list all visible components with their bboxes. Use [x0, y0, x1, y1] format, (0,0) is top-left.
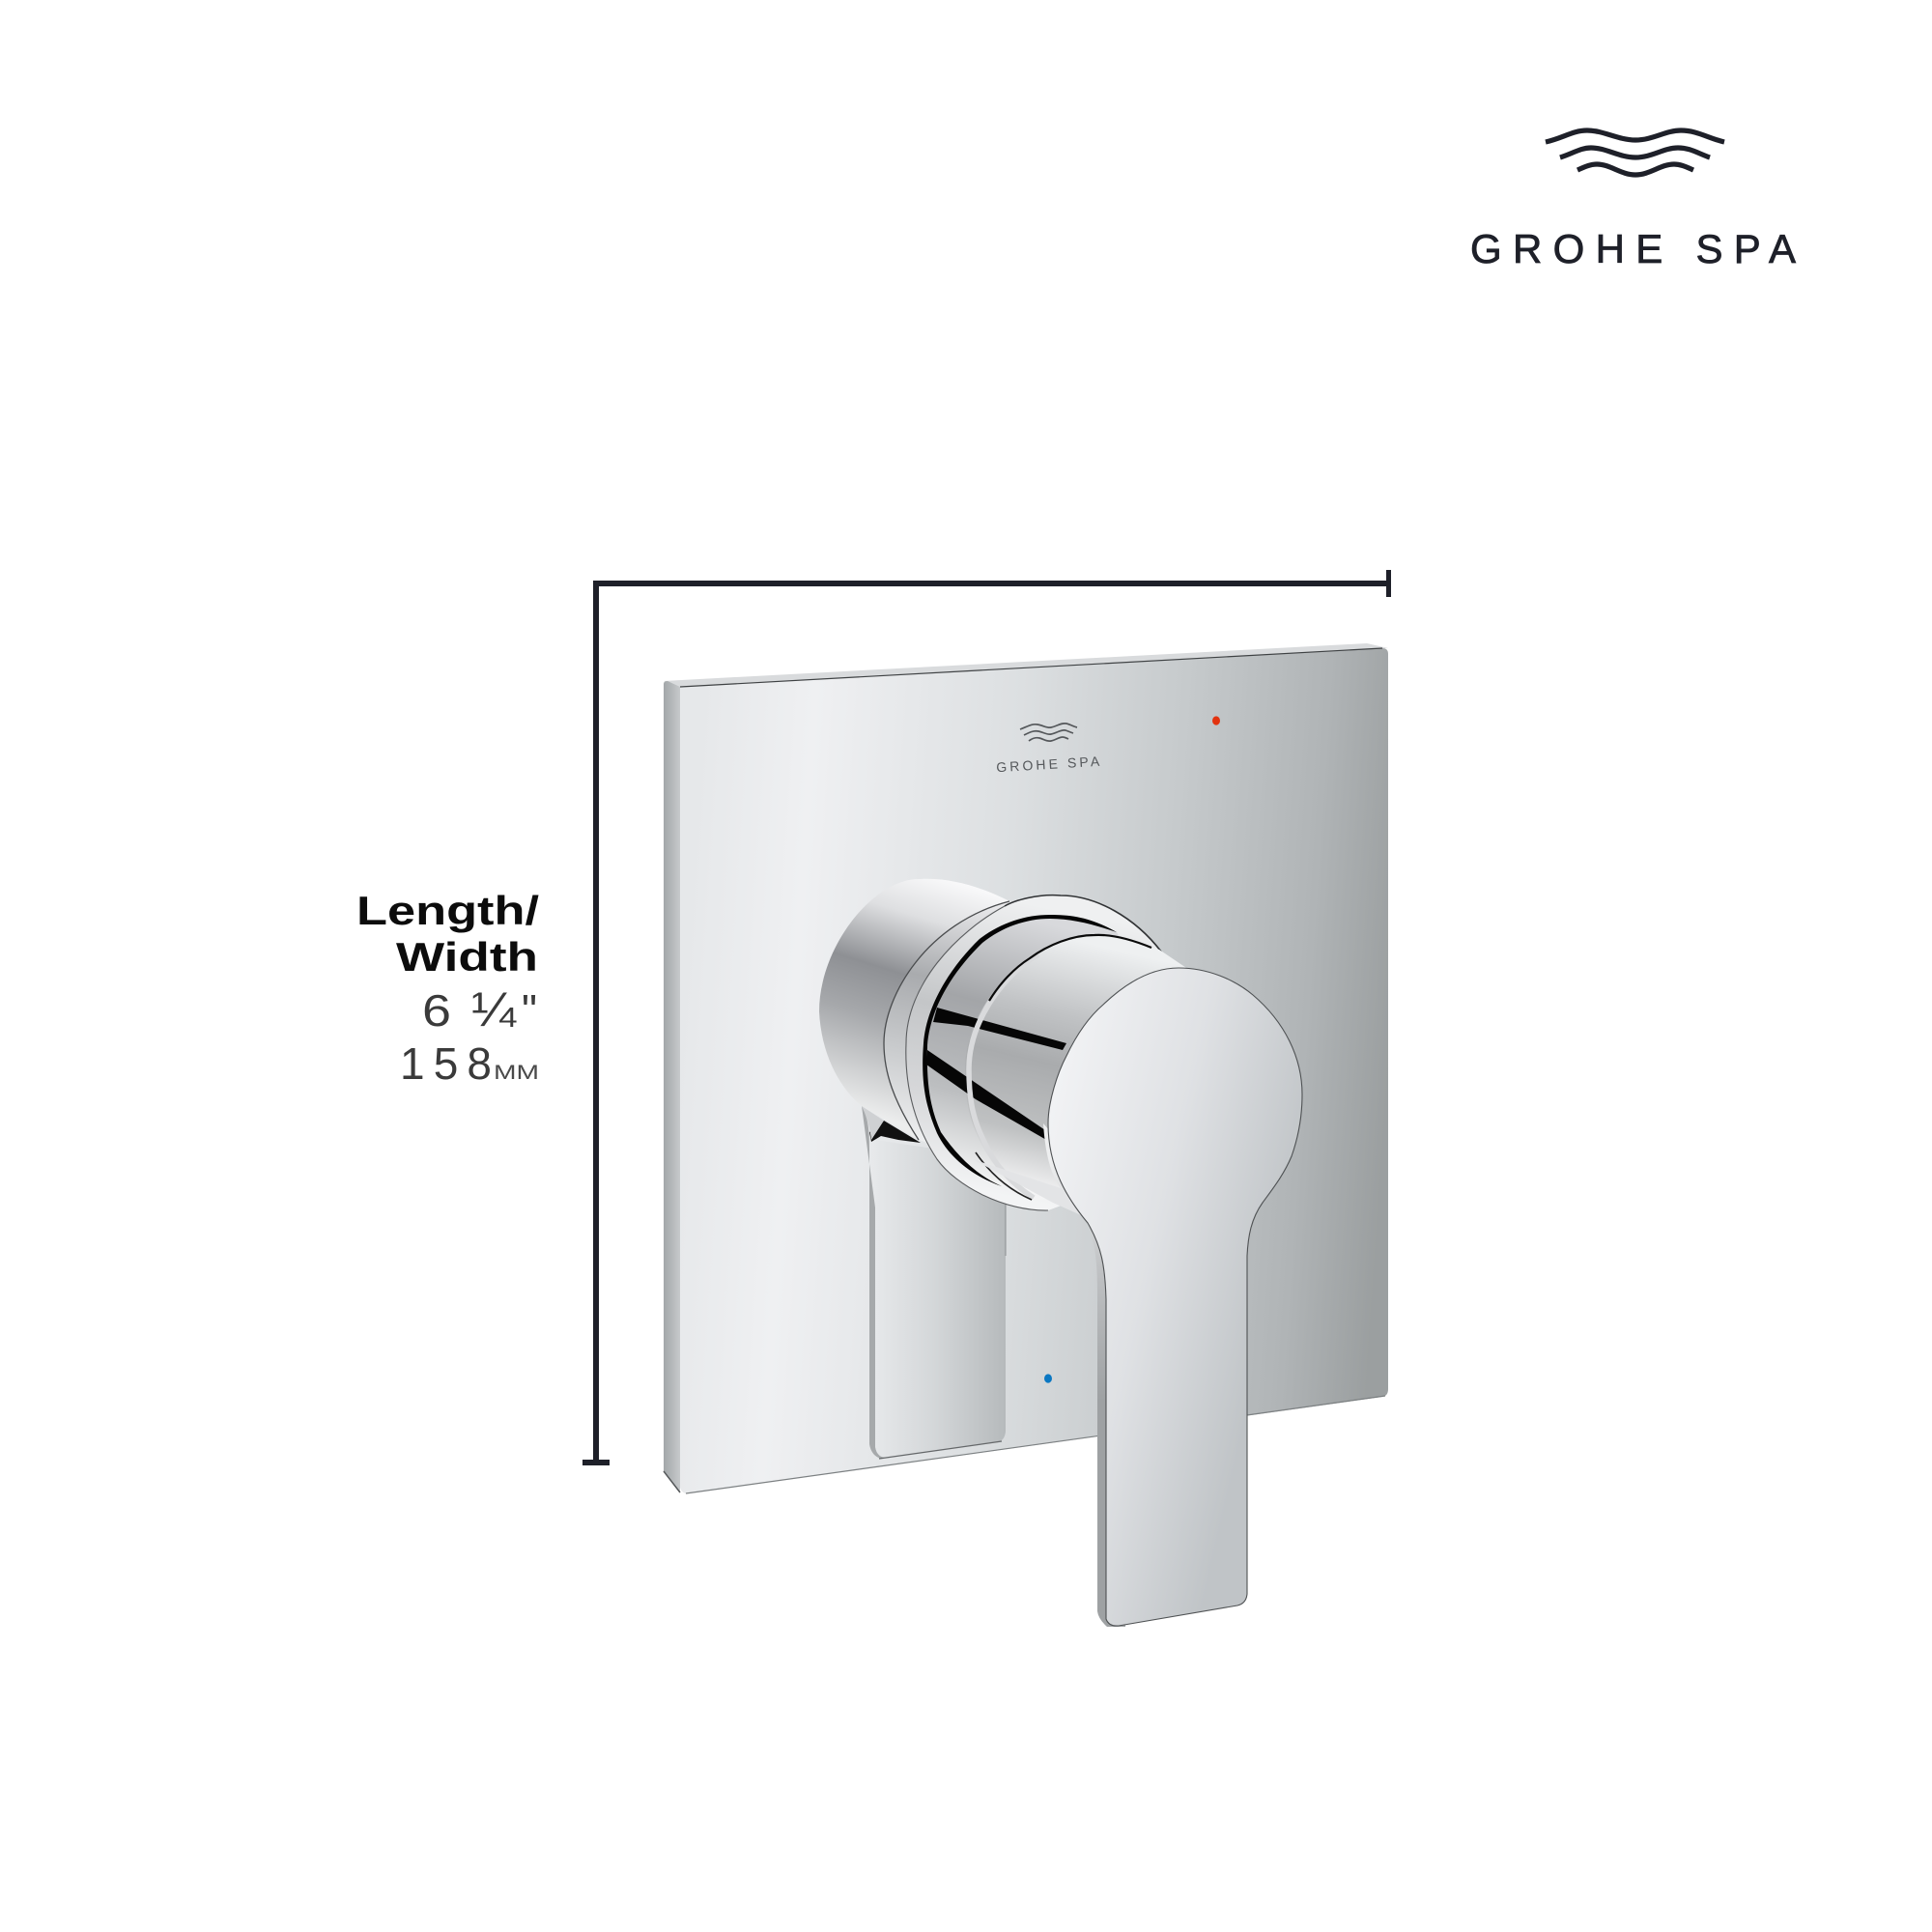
cold indicator: [1044, 1374, 1052, 1383]
wall plate: [664, 643, 1388, 1493]
plate logo: GROHE SPA: [996, 753, 1100, 775]
dimension label: ¼: [471, 982, 517, 1037]
ring band: [884, 901, 1063, 1159]
logo: Grohe Spa: [1470, 130, 1796, 271]
dimension label: Width: [396, 934, 538, 980]
silver front ring: [969, 935, 1151, 1200]
lower lever: [862, 1106, 1006, 1459]
hot indicator: [1212, 716, 1220, 725]
product: shower valve trim: [664, 643, 1388, 1627]
dimension label: 158: [400, 1038, 492, 1089]
dimension label: 6: [422, 985, 451, 1036]
rear cylinder: [819, 879, 1009, 1140]
main handle: [973, 968, 1302, 1627]
front barrel: [965, 935, 1198, 1200]
dimension label: MM: [494, 1062, 539, 1084]
chrome reflection streaks: [926, 1008, 1066, 1141]
inner barrel: [924, 916, 1130, 1185]
wordmark: GROHE SPA: [1470, 226, 1796, 271]
dimension label: [356, 888, 539, 1089]
dimension bracket: [582, 570, 1391, 1465]
handle side band: [1043, 1123, 1159, 1627]
dimension label: Length/: [356, 888, 539, 933]
flange disc: [906, 895, 1161, 1210]
groove: black crescent: [923, 915, 1117, 1186]
plate logo: [996, 724, 1100, 775]
lever neck shadow: [869, 1121, 921, 1143]
handle face: [1048, 968, 1302, 1626]
icon: water waves: [1546, 130, 1724, 175]
dimension label: ": [522, 985, 537, 1036]
